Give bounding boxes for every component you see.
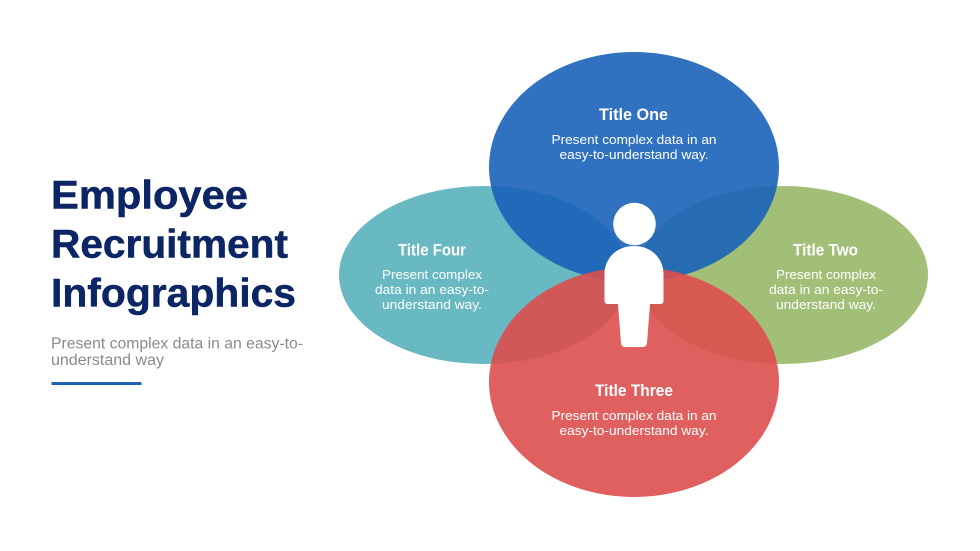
text: title four: understand way.	[382, 297, 482, 312]
venn diagram	[339, 52, 928, 497]
text: title four	[375, 242, 489, 312]
text: title two	[769, 242, 883, 312]
ellipse: title two	[638, 186, 928, 364]
text: title two: understand way.	[776, 297, 876, 312]
ellipse: title four	[339, 186, 629, 364]
title	[51, 174, 296, 316]
text: title four: data in an easy-to-	[375, 282, 489, 297]
ellipse: title three	[489, 267, 779, 497]
text: title two: Title Two	[793, 242, 858, 260]
text: title one: Present complex data in an	[552, 132, 716, 147]
title: Infographics	[51, 272, 296, 316]
text: title two: Present complex	[776, 267, 877, 282]
text: title one	[552, 106, 716, 162]
accent line	[52, 382, 142, 385]
title: Recruitment	[51, 222, 288, 266]
subtitle: Present complex data in an easy-to-	[51, 336, 303, 352]
title: Employee	[51, 174, 248, 218]
text: title two: data in an easy-to-	[769, 282, 883, 297]
ellipse: title one	[489, 52, 779, 282]
text: title four: Present complex	[382, 267, 483, 282]
subtitle: understand way	[51, 352, 164, 369]
text: title one: Title One	[599, 106, 668, 124]
subtitle	[51, 336, 303, 369]
text: title one: easy-to-understand way.	[560, 147, 708, 162]
text: title three: Title Three	[595, 382, 673, 400]
text: title four: Title Four	[398, 242, 467, 260]
text: title three: Present complex data in an	[552, 408, 716, 423]
icon: person	[604, 203, 664, 347]
text: title three	[552, 382, 716, 438]
text: title three: easy-to-understand way.	[560, 423, 708, 438]
